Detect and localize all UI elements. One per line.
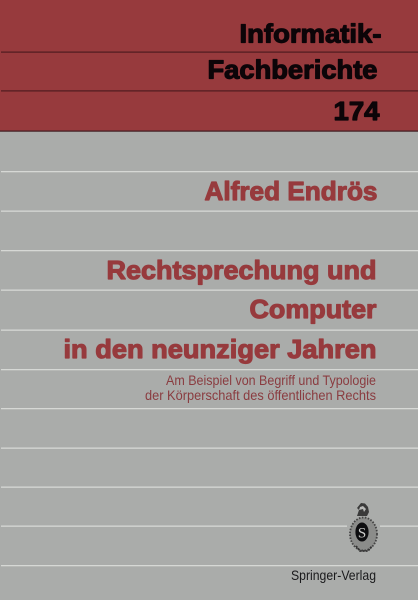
series title line 1: Informatik- [240,18,382,48]
panel: red series band [0,0,418,132]
book title line 3: in den neunziger Jahren [64,334,376,364]
book title line 1: Rechtsprechung und [106,255,376,285]
series title line 2: Fachberichte [208,54,378,84]
subtitle: Am Beispiel von Begriff und Typologie [166,372,376,388]
icon: Springer knight logo [350,503,377,551]
icon: Springer knight logo: S [358,526,366,542]
publisher: Springer-Verlag [291,568,376,583]
subtitle [145,372,376,403]
author: Alfred Endrös [204,176,378,206]
series number: 174 [334,96,380,126]
subtitle: der Körperschaft des öffentlichen Rechts [145,387,376,403]
book title line 2: Computer [250,294,376,324]
